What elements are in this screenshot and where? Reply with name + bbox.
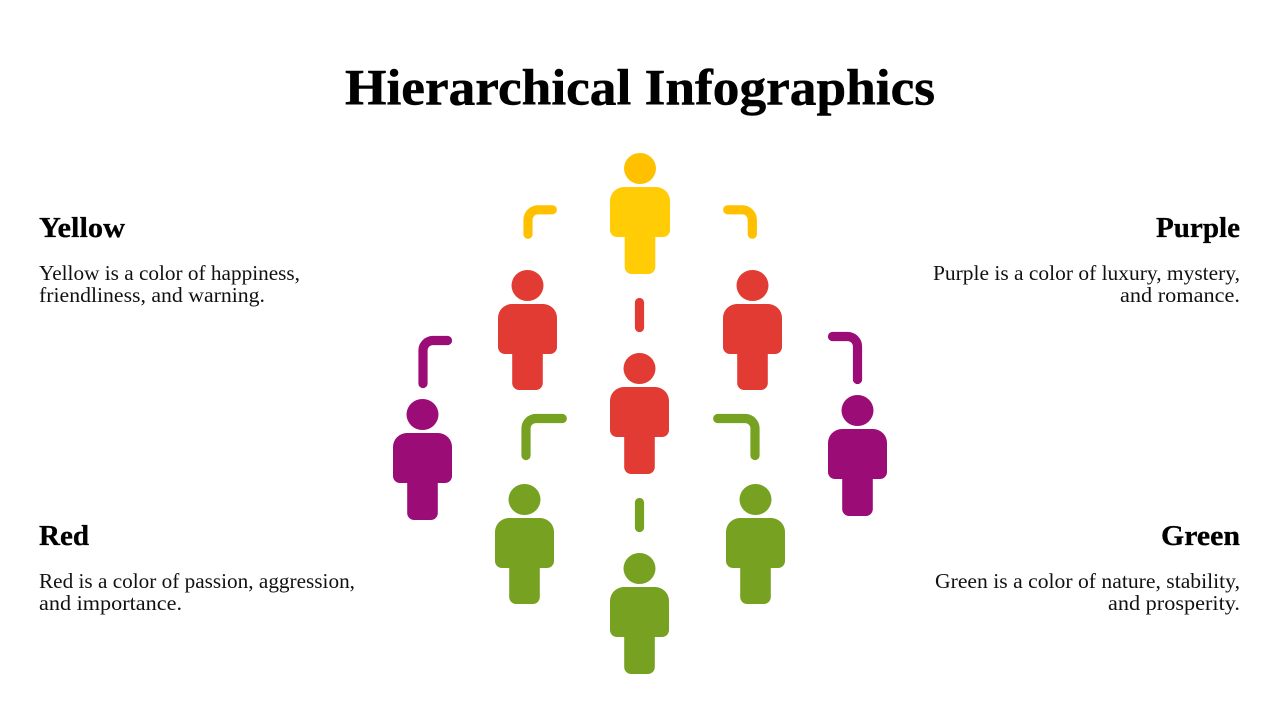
text block: green (935, 521, 1240, 615)
description: green: and prosperity. (1108, 591, 1240, 615)
description: red (39, 569, 355, 615)
heading: red: Red (39, 521, 89, 552)
text block: yellow (39, 213, 300, 307)
icon: red person right (723, 270, 782, 390)
description: green: Green is a color of nature, stability, (935, 569, 1240, 593)
icon: yellow person top (610, 153, 670, 274)
description: purple (933, 261, 1240, 307)
arrow: purple connector right (832, 336, 858, 380)
title: Hierarchical Infographics (345, 60, 935, 116)
icon: green person right (726, 484, 785, 604)
icon: purple person left (393, 399, 452, 520)
description: yellow (39, 261, 300, 307)
icon: red person left (498, 270, 557, 390)
icon: green person left (495, 484, 554, 604)
icon: red person center (610, 353, 669, 474)
icon: green person center (610, 553, 669, 674)
arrow: green connector center (635, 502, 644, 528)
description: purple: and romance. (1120, 283, 1240, 307)
text block: purple (933, 213, 1240, 307)
arrow: yellow connector right (728, 210, 752, 234)
text block: red (39, 521, 355, 615)
arrow: red connector center (635, 302, 644, 328)
icon: purple person right (828, 395, 887, 516)
heading: yellow: Yellow (39, 213, 126, 244)
heading: green: Green (1161, 521, 1240, 552)
description: purple: Purple is a color of luxury, mystery, (933, 261, 1240, 285)
arrow: yellow connector left (528, 210, 552, 234)
arrow: green connector left (526, 418, 562, 456)
description: yellow: Yellow is a color of happiness, (39, 261, 300, 285)
heading: purple: Purple (1156, 213, 1240, 244)
description: red: and importance. (39, 591, 182, 615)
description: red: Red is a color of passion, aggression, (39, 569, 355, 593)
description: yellow: friendliness, and warning. (39, 283, 265, 307)
description: green (935, 569, 1240, 615)
arrow: purple connector left (423, 340, 448, 384)
arrow: green connector right (718, 418, 755, 456)
